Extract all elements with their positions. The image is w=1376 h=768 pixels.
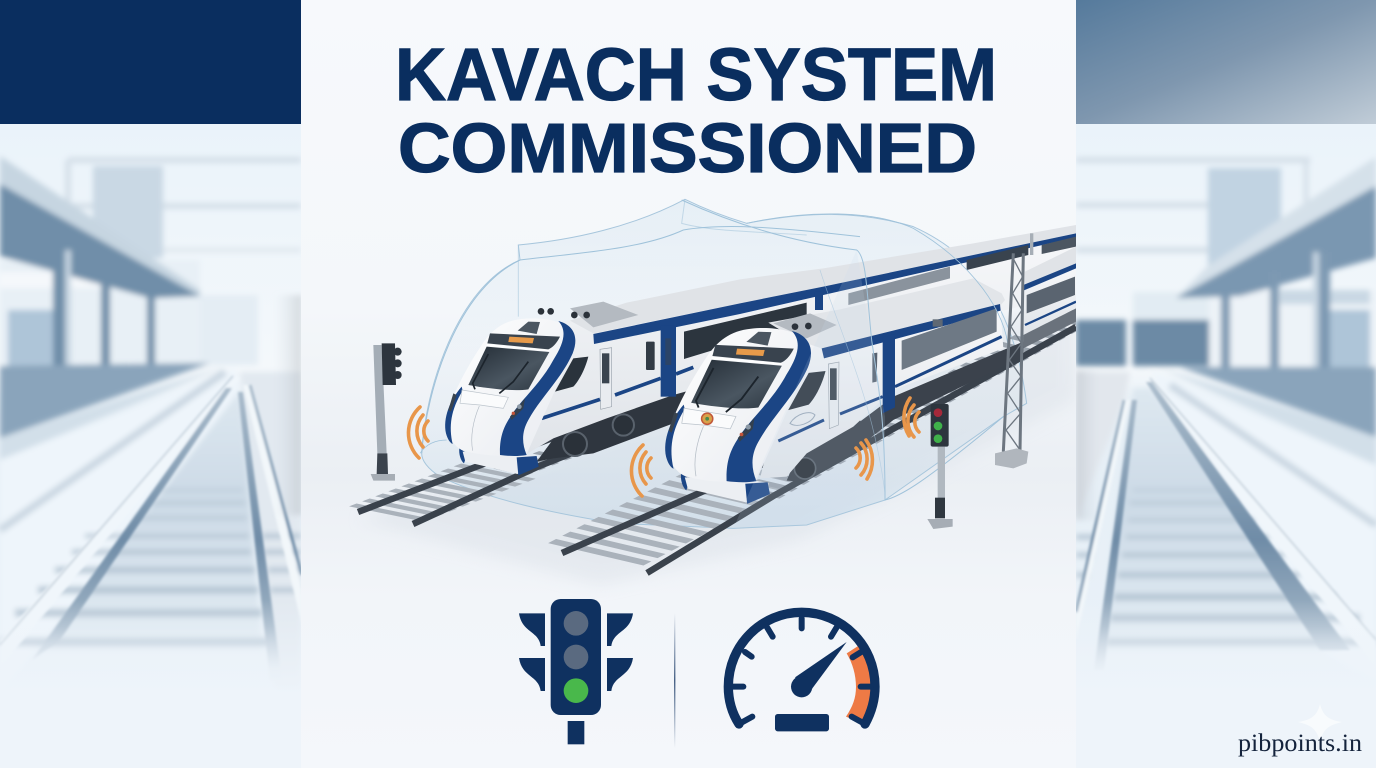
title [395, 33, 997, 187]
track: left [349, 438, 572, 527]
panel: central card [301, 0, 1076, 768]
watermark text: pibpoints.in [1238, 730, 1363, 757]
signal: left trackside [371, 343, 402, 481]
divider between icons [674, 613, 675, 748]
train: left far carriages [815, 233, 1076, 310]
shield dome front edges [682, 200, 1008, 528]
watermark star [1298, 704, 1342, 742]
train: left vande bharat [445, 225, 1076, 475]
title: KAVACH SYSTEM [395, 33, 997, 116]
shield dome back [422, 199, 1027, 528]
wave: left signal [408, 407, 428, 458]
ground shadow [400, 319, 1072, 578]
wave: near signal [904, 398, 919, 437]
wave: right train undercarriage [856, 440, 872, 479]
icon: speedometer [728, 612, 875, 731]
header band right [1076, 0, 1376, 124]
title: COMMISSIONED [398, 109, 977, 187]
signal waves [408, 398, 919, 496]
signal: right trackside [927, 404, 953, 529]
wave: between tracks [631, 445, 651, 496]
train: right vande bharat [665, 278, 1023, 504]
panel: right background railway scene [1076, 155, 1376, 664]
train: right far carriages [1023, 247, 1076, 348]
icon: traffic light [519, 599, 633, 744]
header band left [0, 0, 301, 124]
illustration: trains under kavach shield [358, 199, 1091, 585]
track: right [562, 308, 1091, 573]
panel: left background railway scene [0, 155, 301, 664]
overhead line mast [995, 253, 1028, 468]
shield dome left edge [420, 227, 860, 453]
